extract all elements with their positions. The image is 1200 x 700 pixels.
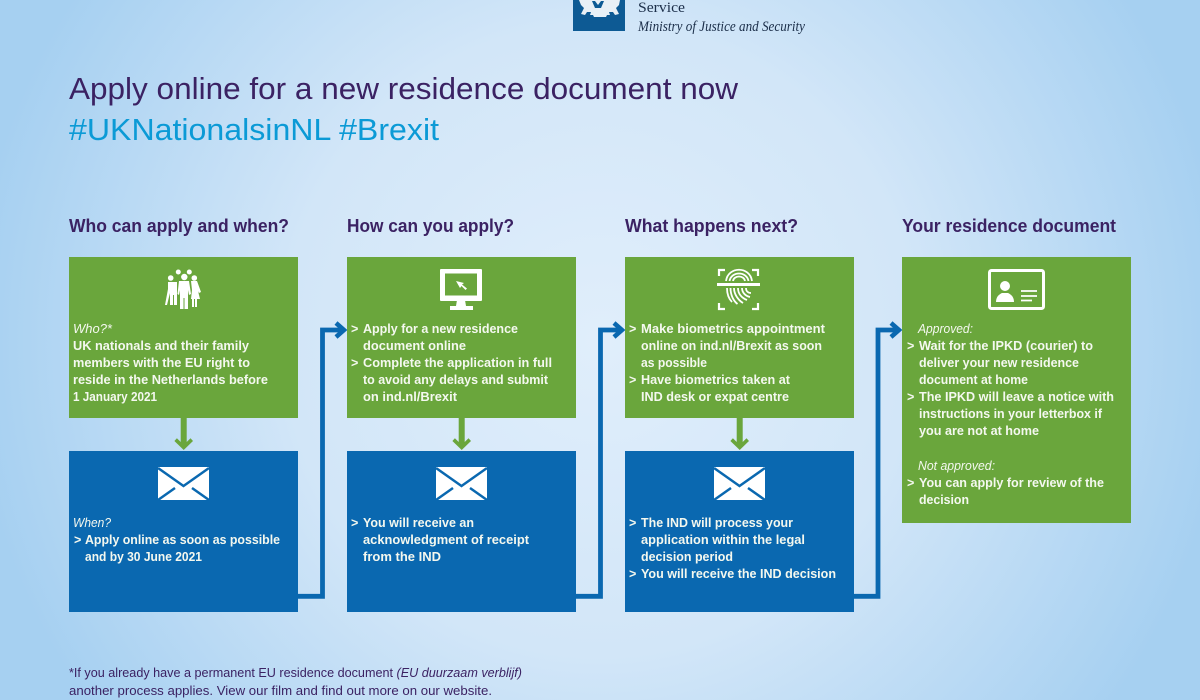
column headings: Who can apply and when?: [69, 216, 289, 236]
text: how to apply: [351, 322, 552, 404]
column headings: What happens next?: [625, 216, 798, 236]
text: decision: You will receive the IND decision: [641, 567, 836, 581]
text: approved: Wait for the IPKD (courier) to: [919, 339, 1093, 353]
text: approved: instructions in your letterbox if: [919, 407, 1103, 421]
panel: decision: [625, 451, 854, 612]
panel: when: [69, 451, 298, 612]
text: when: [73, 516, 280, 564]
text: who: [73, 322, 268, 404]
text: decision: >: [629, 567, 636, 581]
text: how to apply: >: [351, 356, 358, 370]
icon: envelope: [714, 467, 765, 500]
text: when: Apply online as soon as possible: [85, 533, 280, 547]
title: Apply online for a new residence document now: [69, 71, 739, 106]
text: approved: you are not at home: [919, 424, 1039, 438]
text: what happens next: IND desk or expat centre: [641, 390, 789, 404]
text: approved: The IPKD will leave a notice with: [919, 390, 1114, 404]
column headings: [69, 216, 1116, 236]
text: not approved: [907, 459, 1104, 507]
column headings: Your residence document: [902, 216, 1116, 236]
text: how to apply: document online: [363, 339, 466, 353]
text: approved: >: [907, 339, 914, 353]
arrow: biometrics to decision: [730, 418, 749, 450]
panel: how to apply: [347, 257, 576, 418]
icon: people: [165, 270, 201, 309]
arrow: elbow column 2 to 3: [576, 323, 622, 596]
text: how to apply: Apply for a new residence: [363, 322, 518, 336]
text: approved: deliver your new residence: [919, 356, 1079, 370]
text: approved: [907, 322, 1114, 438]
text: who: Who?*: [73, 322, 113, 336]
arrow: elbow column 1 to 2: [298, 323, 344, 596]
text: approved: document at home: [919, 373, 1028, 387]
arrow: who to when: [174, 418, 193, 450]
panel: what happens next: [625, 257, 854, 418]
panel: receipt: [347, 451, 576, 612]
text: when: and by 30 June 2021: [85, 550, 202, 564]
logo block: [573, 0, 625, 31]
text: receipt: >: [351, 516, 358, 530]
arrow: apply to receipt: [452, 418, 471, 450]
text: decision: [629, 516, 836, 581]
text: how to apply: Complete the application in full: [363, 356, 552, 370]
text: receipt: from the IND: [363, 550, 441, 564]
text: what happens next: >: [629, 373, 636, 387]
panel: who: [69, 257, 298, 418]
text: what happens next: >: [629, 322, 636, 336]
text: decision: >: [629, 516, 636, 530]
icon: id card: [990, 270, 1044, 308]
text: approved: >: [907, 390, 914, 404]
footnote: [69, 666, 522, 698]
icon: envelope: [158, 467, 209, 500]
text: receipt: You will receive an: [363, 516, 474, 530]
text: not approved: You can apply for review of the: [919, 476, 1104, 490]
text: when: When?: [73, 516, 111, 530]
logo: ministry header: [573, 0, 805, 35]
text: what happens next: [629, 322, 826, 404]
text: not approved: >: [907, 476, 914, 490]
text: who: reside in the Netherlands before: [73, 373, 268, 387]
text: how to apply: on ind.nl/Brexit: [363, 390, 458, 404]
text: what happens next: as possible: [641, 356, 707, 370]
text: who: members with the EU right to: [73, 356, 250, 370]
icon: monitor: [440, 269, 482, 310]
footnote: *If you already have a permanent EU residence document (EU duurzaam verblijf): [69, 666, 522, 680]
text: what happens next: online on ind.nl/Brexit as soon: [641, 339, 822, 353]
arrow: elbow column 3 to 4: [854, 323, 899, 596]
text: who: UK nationals and their family: [73, 339, 249, 353]
text: not approved: decision: [919, 493, 969, 507]
panel: your residence document: [902, 257, 1131, 523]
text: receipt: acknowledgment of receipt: [363, 533, 530, 547]
hashtags: #UKNationalsinNL #Brexit: [69, 112, 439, 147]
footnote: another process applies. View our film and find out more on our website.: [69, 684, 492, 698]
text: what happens next: Have biometrics taken at: [641, 373, 791, 387]
text: who: 1 January 2021: [73, 390, 157, 404]
text: decision: application within the legal: [641, 533, 805, 547]
text: approved: Approved:: [917, 322, 973, 336]
text: not approved: Not approved:: [918, 459, 995, 473]
logo text: Service: [638, 0, 685, 16]
text: how to apply: to avoid any delays and submit: [363, 373, 549, 387]
text: how to apply: >: [351, 322, 358, 336]
text: what happens next: Make biometrics appointment: [641, 322, 826, 336]
text: decision: The IND will process your: [641, 516, 793, 530]
text: decision: decision period: [641, 550, 733, 564]
text: when: >: [74, 533, 81, 547]
icon: envelope: [436, 467, 487, 500]
logo text: Ministry of Justice and Security: [637, 19, 805, 35]
icon: fingerprint: [717, 270, 760, 309]
column headings: How can you apply?: [347, 216, 514, 236]
text: receipt: [351, 516, 530, 564]
logo text: [637, 0, 805, 35]
